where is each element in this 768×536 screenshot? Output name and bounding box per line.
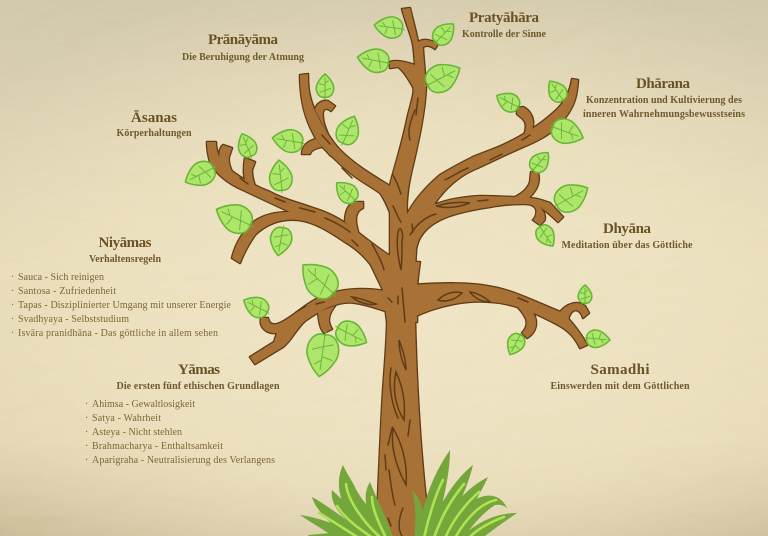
text block: Yamas: · [85, 413, 88, 424]
heading: Asanas: Körperhaltungen [116, 128, 192, 139]
heading: Dharana: inneren Wahrnehmungsbewusstseins [583, 109, 745, 120]
text block: Yamas: Ahimsa - Gewaltlosigkeit [92, 399, 195, 410]
text block: Yamas: Brahmacharya - Enthaltsamkeit [92, 441, 223, 452]
text block: Niyamas: · [11, 300, 14, 311]
heading: Samadhi: Samadhi [590, 362, 650, 378]
heading: Pranayama: Prānāyāma [208, 32, 278, 48]
text block: Niyamas: Niyāmas [98, 235, 152, 251]
bark markings [240, 98, 530, 536]
text block: Yamas: · [85, 399, 88, 410]
heading: Dhyana [562, 221, 693, 251]
heading: Dharana [583, 76, 745, 120]
heading: Dharana: Konzentration und Kultivierung des [586, 95, 742, 106]
heading: Pratyahara [462, 10, 547, 40]
text block: Yamas: Yāmas [178, 362, 220, 378]
text block: Yamas: Aparigraha - Neutralisierung des Verlangens [92, 455, 275, 466]
text block: Yamas: · [85, 441, 88, 452]
text block: Niyamas [11, 235, 232, 339]
heading: Asanas: Āsanas [131, 110, 177, 126]
text block: Yamas: Asteya - Nicht stehlen [92, 427, 182, 438]
text block: Niyamas: Isvāra pranidhāna - Das göttliche in allem sehen [18, 328, 218, 339]
text block: Niyamas: Sauca - Sich reinigen [18, 272, 104, 283]
text block: Yamas: · [85, 455, 88, 466]
heading: Dhyana: Meditation über das Göttliche [562, 240, 693, 251]
grass [300, 450, 517, 536]
text block: Yamas [85, 362, 280, 466]
text block: Niyamas: · [11, 314, 14, 325]
text block: Niyamas: Svadhyaya - Selbststudium [18, 314, 129, 325]
text block: Niyamas: · [11, 286, 14, 297]
heading: Pratyahara: Pratyāhāra [469, 10, 540, 26]
heading: Pranayama [182, 32, 304, 63]
text block: Niyamas: Tapas - Disziplinierter Umgang mit unserer Energie [18, 300, 232, 311]
heading: Pranayama: Die Beruhigung der Atmung [182, 52, 304, 63]
text block: Niyamas: Verhaltensregeln [89, 254, 161, 265]
heading: Samadhi: Einswerden mit dem Göttlichen [550, 381, 690, 392]
heading: Asanas [116, 110, 192, 139]
text block: Yamas: · [85, 427, 88, 438]
heading: Dhyana: Dhyāna [603, 221, 652, 237]
heading: Pratyahara: Kontrolle der Sinne [462, 29, 547, 40]
text block: Niyamas: · [11, 328, 14, 339]
text block: Yamas: Die ersten fünf ethischen Grundlagen [116, 381, 280, 392]
tree [207, 8, 589, 536]
text block: Niyamas: · [11, 272, 14, 283]
leaves [180, 15, 611, 379]
text block: Niyamas: Santosa - Zufriedenheit [18, 286, 116, 297]
text block: Yamas: Satya - Wahrheit [92, 413, 161, 424]
heading: Samadhi [550, 362, 690, 392]
heading: Dharana: Dhārana [636, 76, 690, 92]
